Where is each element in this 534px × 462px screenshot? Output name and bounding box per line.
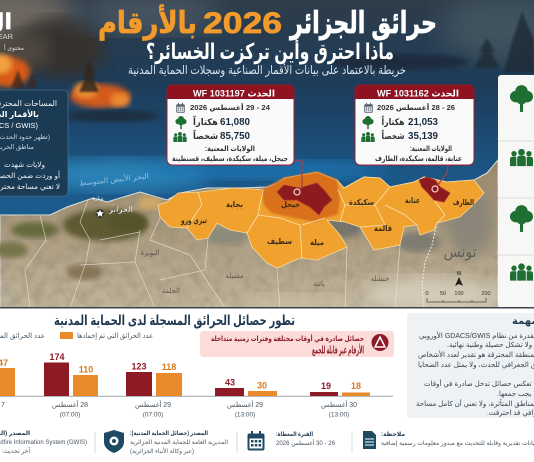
group: 29 August 13:00: 43 [225, 378, 235, 388]
footer: period covered [276, 431, 336, 447]
title [98, 4, 437, 41]
panel: important notes: ولا تشكل حصيلة وطنية نهائية. [447, 341, 532, 349]
icon: calendar [248, 431, 264, 450]
label: Mediterranean Sea: البحر الأبيض المتوسط [79, 171, 149, 188]
footer: note: ملاحظة: [381, 431, 405, 438]
chart heading: تطور حصائل الحرائق المسجلة لدى الحماية المدنية [54, 312, 295, 329]
card: event WF 1031162: 21,053 [408, 117, 438, 128]
red burn area: Annaba [419, 177, 450, 202]
footer: civil protection source: (عبر وكالة الأنباء الجزائرية) [130, 447, 194, 455]
map labels [180, 196, 474, 247]
map labels: سكيكدة [349, 198, 374, 207]
red burn area: Jijel [277, 183, 332, 215]
label: Tunisia: تونس [444, 244, 476, 261]
group: 29 August 07:00: 118 [162, 362, 176, 372]
card: event WF 1031197 [167, 85, 294, 165]
footer: civil protection source: المديرية العامة للحماية المدنية الجزائرية [130, 439, 228, 446]
group: 29 August 13:00: 29 أغسطس [227, 400, 263, 409]
group: first date [0, 358, 15, 409]
chart legend [0, 332, 153, 340]
gray map labels: الجلفة [162, 288, 180, 295]
card: event WF 1031162: 35,139 [408, 131, 438, 142]
logo: محتوى أ [4, 44, 24, 52]
group: 28 August 07:00: 110 [79, 364, 93, 374]
dark orange Jijel zone [262, 172, 340, 222]
panel: left info: ولايات شهدت [4, 160, 45, 169]
panel: left info [0, 90, 68, 196]
map labels: الطارف [453, 198, 474, 207]
gray map labels: مسيلة [225, 273, 244, 280]
group: 28 August 07:00 [44, 352, 98, 418]
north arrow [455, 271, 463, 286]
map labels: ميلة [310, 238, 324, 247]
footer: civil protection source: المصدر (حصائل الحماية المدنية): [130, 430, 208, 437]
label: Algiers with star [93, 196, 133, 218]
scale bar [425, 291, 491, 302]
card: event WF 1031197: جيجل، ميلة، سكيكدة، سطيف، قسنطينة [172, 154, 288, 163]
group: 30 August 13:00: 30 أغسطس [321, 400, 357, 409]
card: event WF 1031162: عنابة، قالمة، سكيكدة، الطارف [375, 154, 462, 163]
map labels: بجاية [226, 200, 243, 209]
map labels: سطيف [267, 237, 292, 246]
map [0, 160, 500, 313]
group: 29 August 13:00: 30 [257, 380, 267, 390]
card: event WF 1031162: 26 - 28 أغسطس 2026 [377, 103, 455, 112]
footer: civil protection source [130, 430, 228, 455]
map labels: عنابة [405, 196, 420, 205]
gray map labels [140, 250, 389, 295]
title: بالأرقام [98, 4, 197, 41]
chart legend: عدد الحرائق التي تم إخمادها [77, 333, 153, 340]
logo [0, 9, 24, 52]
bottom white background [0, 307, 534, 462]
panel: important notes [407, 313, 534, 418]
card: event WF 1031197: 85,750 [220, 131, 250, 142]
title: حرائق الجزائر [289, 7, 437, 40]
subtitle: ماذا احترق وأين تركزت الخسائر؟ [146, 36, 394, 65]
orange wilayas [158, 172, 484, 268]
group: 30 August 13:00: 18 [351, 381, 361, 391]
card: event WF 1031197: 61,080 [220, 117, 250, 128]
group: 28 August 07:00: 28 أغسطس [52, 400, 88, 409]
scale bar: 50 [440, 291, 446, 297]
group: 28 August 07:00: (07:00) [60, 412, 80, 418]
group: 29 August 07:00: 123 [131, 362, 147, 372]
icon: shield [104, 430, 124, 453]
photo: pine trees right [474, 12, 534, 72]
label: Algiers with star: تيبازة [93, 196, 104, 202]
icon: tree 1 [510, 85, 533, 112]
land base [0, 160, 498, 308]
group: first date: 7 [1, 402, 5, 409]
label: Algiers with star: الجزائر [108, 204, 133, 215]
Tunisia border [422, 223, 437, 308]
description line: خريطة بالاعتماد على بيانات الأقمار الصناعية وسجلات الحماية المدنية [128, 62, 406, 78]
group: 29 August 07:00: (07:00) [143, 412, 163, 418]
card: event WF 1031162: هكتاراً [381, 115, 404, 128]
map labels: تيزي وزو [180, 216, 207, 225]
divider [95, 432, 352, 453]
title: 2026 [203, 7, 282, 40]
icon: people 1 [510, 149, 533, 166]
group: 30 August 13:00: (13:00) [329, 412, 349, 418]
footer: note [381, 431, 534, 447]
gray map labels: باتنة [313, 281, 325, 288]
group: 29 August 07:00: 29 أغسطس [135, 400, 171, 409]
footer: period covered: 26 - 30 أغسطس 2026 [276, 439, 336, 447]
bar chart [0, 352, 393, 418]
icon: people 2 [510, 263, 533, 281]
gray map labels: البويرة [140, 250, 160, 257]
map labels: قالمة [374, 224, 392, 233]
wilaya borders [187, 187, 445, 258]
icon: document [363, 431, 376, 449]
footer: GWIS source [0, 430, 87, 455]
scale bar: 100 [454, 291, 464, 297]
map labels: جيجل [281, 200, 300, 209]
card: event WF 1031197: 24 - 29 أغسطس 2026 [190, 103, 270, 112]
card: event WF 1031197: الولايات المعنية: [205, 144, 255, 153]
scale bar: 200 [481, 291, 491, 297]
card: event WF 1031197: هكتاراً [192, 115, 218, 128]
group: 29 August 13:00 [215, 378, 277, 418]
group: 29 August 13:00: (13:00) [235, 412, 255, 418]
callout: figures cannot be summed: الأرقام غير قابلة للجمع [312, 344, 364, 356]
group: 28 August 07:00: 174 [49, 352, 65, 362]
north arrow: N [457, 271, 461, 277]
card: event WF 1031197: الحدث WF 1031197 [193, 88, 275, 100]
scale bar: 0 [425, 291, 429, 297]
footer: period covered: الفترة المغطاة: [276, 431, 313, 438]
card: event WF 1031197: شخصاً [192, 129, 218, 141]
photo: forest fire left [0, 54, 160, 122]
card: event WF 1031162: الحدث WF 1031162 [377, 88, 459, 100]
callout: figures cannot be summed [200, 331, 394, 357]
land texture [0, 160, 500, 313]
card: event WF 1031162 [355, 85, 474, 165]
card: event WF 1031162: شخصاً [381, 129, 405, 141]
group: 30 August 13:00 [310, 381, 370, 418]
connector: card 1 to Jijel [294, 160, 302, 195]
panel: left info: (تظهر حدود الحدث [0, 134, 50, 141]
group: 30 August 13:00: 19 [321, 381, 331, 391]
background: sky and sea [0, 0, 534, 310]
card: event WF 1031162: الولايات المعنية: [410, 144, 452, 153]
gray map labels: خنشلة [371, 276, 389, 283]
land borders [25, 200, 400, 308]
panel: right statistics [498, 75, 534, 308]
connector: card 2 to Annaba [432, 165, 448, 192]
icon: tree 2 [510, 205, 533, 232]
group: 29 August 07:00 [126, 362, 182, 418]
callout: figures cannot be summed: حصائل صادرة في أوقات مختلفة وفترات زمنية متداخلة [211, 334, 364, 343]
